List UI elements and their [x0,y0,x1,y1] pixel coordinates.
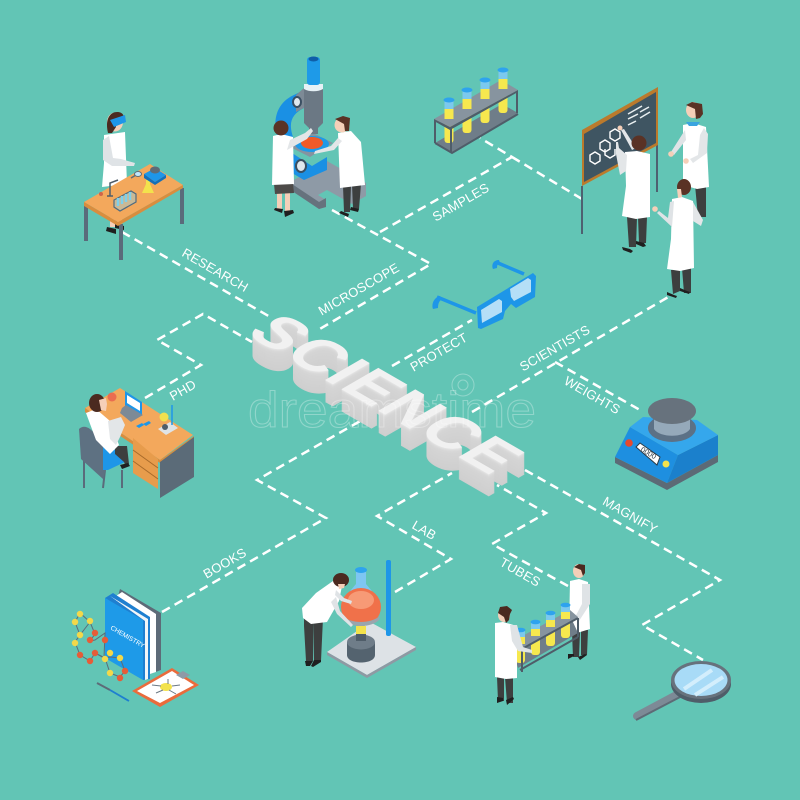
label: books: BOOKS [201,545,249,581]
mini scale [144,168,166,182]
burner [347,626,375,662]
mini magnifier [131,175,136,178]
icon: microscope with two scientists [272,56,366,217]
icon: test tube rack samples [434,68,518,153]
icon: scientist in foreground [652,179,703,298]
molecule model [72,611,128,681]
objective tube [304,87,323,134]
icon: flask on burner with scientist [302,560,416,678]
blue rod [386,560,391,636]
cover title: CHEMISTRY [109,625,146,650]
table legs [84,188,184,260]
label: magnify: MAGNIFY [600,493,660,537]
upper deck [434,80,518,127]
icon: researcher at lab table [84,112,184,260]
laptop [120,391,143,422]
desk [85,388,194,498]
tube rack on table [114,191,136,211]
rack [513,603,578,672]
table top [84,164,183,222]
icon: chemistry books and molecule [72,589,199,707]
label: protect: PROTECT [407,330,470,374]
formula lines [628,106,650,125]
frame [477,273,536,329]
back scientist [568,564,590,660]
blue arm [275,90,304,142]
red flask [108,392,116,402]
molecule drawing [590,129,620,164]
icon: PhD scientist at desk [79,388,194,498]
label: research: RESEARCH [180,245,251,295]
icon: tube rack carried by two scientists [495,564,590,705]
heading: 3D word SCIENCE: SCIENCE [232,306,540,483]
red button [625,439,633,447]
scientist woman [272,120,313,217]
icon: scientist standing [668,102,709,217]
label: scientists: SCIENTISTS [517,322,593,374]
label: samples: SAMPLES [430,180,492,224]
flask [142,180,154,193]
icon: blackboard [582,87,658,234]
watermark: dreamstime [248,382,536,438]
clipboard [132,668,199,707]
tubes lower [444,85,508,143]
person [86,394,130,469]
label: microscope: MICROSCOPE [316,260,402,318]
yellow button [662,460,670,468]
back book [118,589,161,674]
blue pillar [292,153,327,180]
glasses on desk [136,421,151,428]
bending scientist [302,573,353,667]
icon: safety goggles [432,260,536,329]
burner stand [107,180,118,196]
microscope base [292,161,366,209]
label: weights: WEIGHTS [562,373,623,417]
stage plate [290,133,333,157]
front book [105,593,150,680]
yellow flask [158,405,178,435]
front scientist [495,606,532,705]
tubes upper [444,68,508,119]
icon: weighing scale [615,398,718,490]
pan pillar [648,414,696,442]
lower deck [435,104,518,153]
woman researcher [102,112,135,234]
label: tubes: TUBES [497,555,543,590]
chair [79,427,127,488]
scientist man [314,116,365,217]
pen [97,683,110,690]
icon: scientist at board [616,126,650,253]
display: 0000 [639,445,658,461]
icon: magnifying glass [636,661,731,720]
label: lab: LAB [410,517,439,543]
lenses [481,278,531,323]
label: phd: PHD [167,377,199,404]
dashed connector lines [122,138,720,660]
temples [437,297,476,313]
flask [341,567,381,626]
base plate [327,622,416,675]
